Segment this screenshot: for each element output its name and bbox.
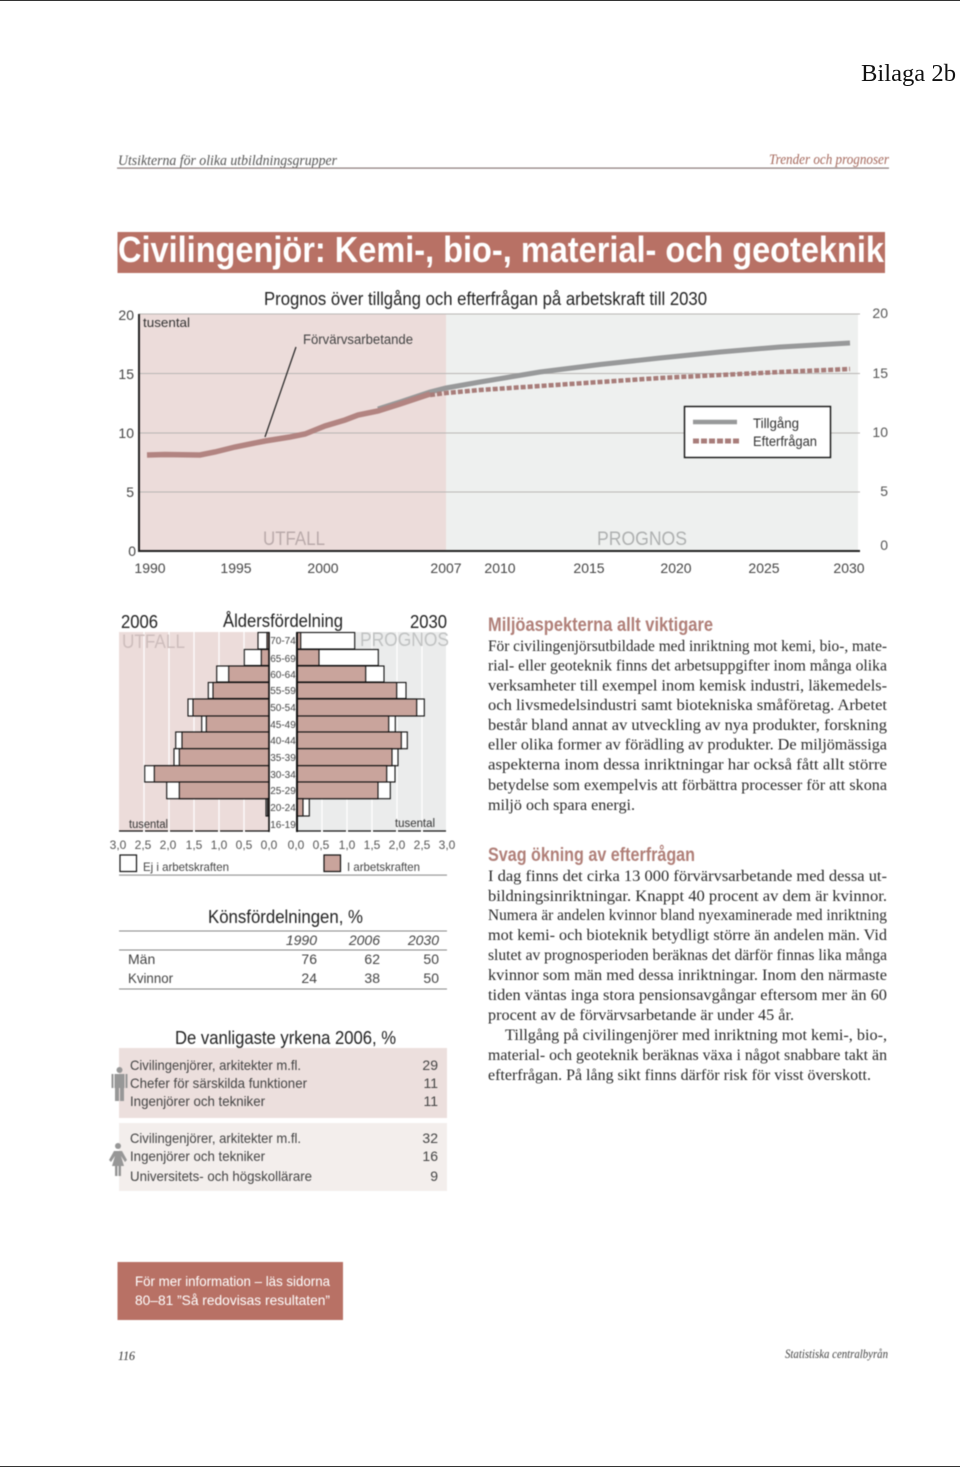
pyramid x axis labels: 0,0 — [261, 838, 278, 852]
age labels: 70-74 — [270, 636, 296, 647]
article section: Svag ökning av efterfrågan: efterfrågan. På lång sikt finns därför risk för visst överskott. — [488, 1067, 871, 1084]
article section: Svag ökning av efterfrågan: Numera är andelen kvinnor bland nyexaminerade med inriktning — [488, 907, 887, 924]
page number: 116 — [118, 1348, 135, 1363]
chart legend: Tillgång — [753, 416, 799, 431]
pyramid x axis labels: 1,5 — [186, 838, 203, 852]
panel: occupations women — [119, 1123, 447, 1191]
age labels — [270, 636, 296, 831]
article section: Miljöaspekterna allt viktigare: verksamheter till exempel inom kemisk industri, läkemedels- — [488, 678, 887, 694]
right axis labels: 15 — [872, 365, 888, 381]
pyramid headings: PROGNOS — [360, 630, 449, 651]
pyramid headings: 2006 — [121, 612, 158, 632]
panel: occupations men: 11 — [423, 1093, 438, 1109]
pyramid x axis labels: 2,5 — [135, 838, 152, 852]
age labels: 30-34 — [270, 770, 296, 781]
line chart: supply and demand forecast — [118, 289, 888, 576]
pyramid headings: 2030 — [410, 612, 447, 632]
table: gender distribution: 2030 — [407, 932, 439, 948]
line chart: supply and demand forecast: tusental — [143, 316, 190, 330]
article section: Svag ökning av efterfrågan: I dag finns det cirka 13 000 förvärvsarbetande med dessa ut- — [488, 868, 887, 885]
running header: Utsikterna för olika utbildningsgrupper — [118, 153, 337, 169]
article section: Miljöaspekterna allt viktigare: aspekterna inom dessa inriktningar har också fått allt större — [488, 756, 887, 774]
pyramid x axis labels: 2,0 — [160, 838, 177, 852]
panel: occupations men: Chefer för särskilda funktioner — [130, 1075, 307, 1091]
panel: occupations women: 9 — [430, 1168, 438, 1184]
annotation: Förvärvsarbetande: Förvärvsarbetande — [303, 332, 413, 347]
age labels: 25-29 — [270, 786, 296, 797]
table: gender distribution: Kvinnor — [128, 970, 173, 986]
age labels: 16-19 — [270, 820, 296, 831]
year labels: 2010 — [484, 560, 516, 576]
year labels: 1995 — [220, 560, 252, 576]
icon: woman — [109, 1143, 127, 1176]
table: gender distribution: 24 — [301, 970, 317, 986]
year labels: 2020 — [660, 560, 692, 576]
population pyramid: age distribution: tusental — [129, 819, 168, 831]
panel: occupations women: Civilingenjörer, arkitekter m.fl. — [130, 1130, 301, 1146]
publisher: Statistiska centralbyrån — [785, 1346, 888, 1361]
pyramid x axis labels: 1,0 — [211, 838, 228, 852]
left axis labels: 0 — [128, 543, 136, 559]
table: gender distribution: 76 — [301, 951, 317, 967]
table: gender distribution: Könsfördelningen, % — [208, 907, 363, 927]
pyramid x axis labels: 0,5 — [313, 838, 330, 852]
age labels: 40-44 — [270, 736, 296, 747]
table: gender distribution: 50 — [423, 970, 439, 986]
table: gender distribution: Män — [128, 951, 155, 967]
left axis labels: 20 — [118, 307, 134, 323]
article section: Miljöaspekterna allt viktigare: För civilingenjörsutbildade med inriktning mot kemi, bio-, mate- — [488, 638, 887, 655]
year labels — [134, 560, 865, 576]
year labels: 2007 — [430, 560, 462, 576]
article section: Svag ökning av efterfrågan — [488, 845, 887, 1084]
panel: occupations women: Ingenjörer och tekniker — [130, 1148, 265, 1164]
population pyramid: age distribution: tusental — [395, 818, 435, 830]
pyramid legend: I arbetskraften — [347, 860, 420, 874]
article section: Miljöaspekterna allt viktigare: betydelse som exempelvis att förbättra processer för att skona — [488, 777, 887, 794]
pyramid x axis labels: 3,0 — [110, 838, 127, 852]
article section: Svag ökning av efterfrågan: procent av de förvärvsarbetande är under 45 år. — [488, 1007, 794, 1024]
age labels: 55-59 — [270, 686, 296, 697]
panel: occupations men — [119, 1048, 447, 1118]
chart legend — [684, 406, 830, 458]
age labels: 50-54 — [270, 703, 296, 714]
info box: more information: 80–81 ”Så redovisas resultaten” — [135, 1292, 330, 1308]
bars 2030: in labour force — [297, 632, 417, 816]
pyramid headings: UTFALL — [122, 632, 185, 653]
article section: Miljöaspekterna allt viktigare: består bland annat av utveckling av nya produkter, forskning — [488, 717, 887, 734]
left axis labels: 5 — [126, 484, 134, 500]
right axis labels — [872, 305, 888, 553]
pyramid headings — [121, 611, 449, 653]
year labels: 2000 — [307, 560, 339, 576]
article section: Miljöaspekterna allt viktigare: rial- eller geoteknik finns det arbetsuppgifter inom många olika — [488, 658, 887, 674]
panel: occupations women: 16 — [422, 1148, 438, 1164]
chart legend: Efterfrågan — [753, 434, 817, 449]
demand dashed line — [430, 369, 850, 395]
table: gender distribution — [119, 907, 447, 990]
article section: Svag ökning av efterfrågan: Svag ökning av efterfrågan — [488, 845, 695, 866]
left axis labels: 15 — [118, 366, 134, 382]
left axis labels — [118, 307, 136, 559]
supply line — [378, 343, 850, 409]
right axis labels: 20 — [872, 305, 888, 321]
age labels: 20-24 — [270, 803, 296, 814]
article section: Miljöaspekterna allt viktigare: eller olika former av förädling av produkter. De miljömässiga — [488, 736, 887, 754]
pyramid x axis labels: 3,0 — [439, 838, 456, 852]
table: gender distribution: 2006 — [348, 932, 380, 948]
panel: occupations women: Universitets- och högskollärare — [130, 1168, 312, 1184]
article section: Miljöaspekterna allt viktigare — [488, 615, 888, 814]
table: gender distribution: 62 — [364, 951, 380, 967]
article section: Svag ökning av efterfrågan: kvinnor som män med dessa inriktningar. Inom den närmaste — [488, 967, 887, 984]
right axis labels: 0 — [880, 537, 888, 553]
population pyramid: age distribution — [110, 611, 456, 876]
table: gender distribution: 38 — [364, 970, 380, 986]
table: gender distribution: 50 — [423, 951, 439, 967]
bars 2006: not in labour force — [145, 632, 269, 816]
bars 2006: in labour force — [154, 632, 269, 816]
pyramid x axis labels: 0,0 — [288, 838, 305, 852]
line chart: supply and demand forecast: PROGNOS — [597, 529, 687, 550]
article section: Svag ökning av efterfrågan: material- och geoteknik beräknas växa i något snabbare takt än — [488, 1047, 887, 1064]
employed historic line — [147, 394, 430, 455]
info box: more information: För mer information – läs sidorna — [135, 1273, 330, 1289]
article section: Miljöaspekterna allt viktigare: miljö och spara energi. — [488, 797, 635, 814]
table: gender distribution: 1990 — [286, 932, 317, 948]
panel: occupations men: Civilingenjörer, arkitekter m.fl. — [130, 1057, 301, 1073]
age labels: 35-39 — [270, 753, 296, 764]
article section: Miljöaspekterna allt viktigare: Miljöaspekterna allt viktigare — [488, 615, 713, 636]
heading: most common occupations: De vanligaste yrkena 2006, % — [175, 1028, 396, 1048]
left axis labels: 10 — [118, 425, 134, 441]
article section: Svag ökning av efterfrågan: mot kemi- och bioteknik betydligt större än andelen män. Vid — [488, 927, 887, 944]
panel: occupations women: 32 — [422, 1130, 438, 1146]
line chart: supply and demand forecast: UTFALL — [263, 529, 325, 550]
pyramid x axis labels: 2,5 — [414, 838, 431, 852]
year labels: 2015 — [573, 560, 605, 576]
article section: Svag ökning av efterfrågan: tiden väntas inga stora pensionsavgångar eftersom mer än 60 — [488, 987, 887, 1004]
pyramid x axis labels: 1,5 — [364, 838, 381, 852]
article section: Svag ökning av efterfrågan: bildningsinriktningar. Knappt 40 procent av dem är kvinnor. — [488, 888, 887, 905]
bars 2030: not in labour force — [297, 632, 424, 816]
icon: man — [112, 1067, 128, 1101]
pyramid legend: Ej i arbetskraften — [143, 860, 229, 874]
age labels: 45-49 — [270, 720, 296, 731]
running header: Trender och prognoser — [769, 152, 889, 168]
title banner: Civilingenjör: Kemi-, bio-, material- och geoteknik — [118, 229, 885, 270]
right axis labels: 10 — [872, 424, 888, 440]
age labels: 60-64 — [270, 670, 296, 681]
running header — [117, 152, 889, 169]
year labels: 1990 — [134, 560, 166, 576]
pyramid x axis labels: 0,5 — [236, 838, 253, 852]
page label: Bilaga 2b: Bilaga 2b — [861, 61, 956, 87]
panel: occupations men: Ingenjörer och tekniker — [130, 1093, 265, 1109]
panel: occupations men: 11 — [423, 1075, 438, 1091]
pyramid headings: Åldersfördelning — [223, 611, 343, 631]
article section: Svag ökning av efterfrågan: slutet av prognosperioden beräknas det därför finnas lika många — [488, 947, 887, 964]
pyramid x axis labels: 1,0 — [339, 838, 356, 852]
article section: Miljöaspekterna allt viktigare: och livsmedelsindustri samt biotekniska småföretag. Arbetet — [488, 697, 888, 714]
annotation: Förvärvsarbetande — [265, 332, 413, 437]
article section: Svag ökning av efterfrågan: Tillgång på civilingenjörer med inriktning mot kemi-, bio-, — [505, 1027, 887, 1044]
year labels: 2030 — [833, 560, 865, 576]
age labels: 65-69 — [270, 654, 296, 665]
chart title: Prognos över tillgång och efterfrågan på arbetskraft till 2030 — [264, 289, 707, 309]
pyramid x axis labels: 2,0 — [389, 838, 406, 852]
year labels: 2025 — [748, 560, 780, 576]
right axis labels: 5 — [880, 483, 888, 499]
panel: occupations men: 29 — [422, 1057, 438, 1073]
pyramid x axis labels — [110, 838, 456, 852]
info box: more information — [118, 1262, 343, 1320]
pyramid legend — [119, 855, 447, 876]
